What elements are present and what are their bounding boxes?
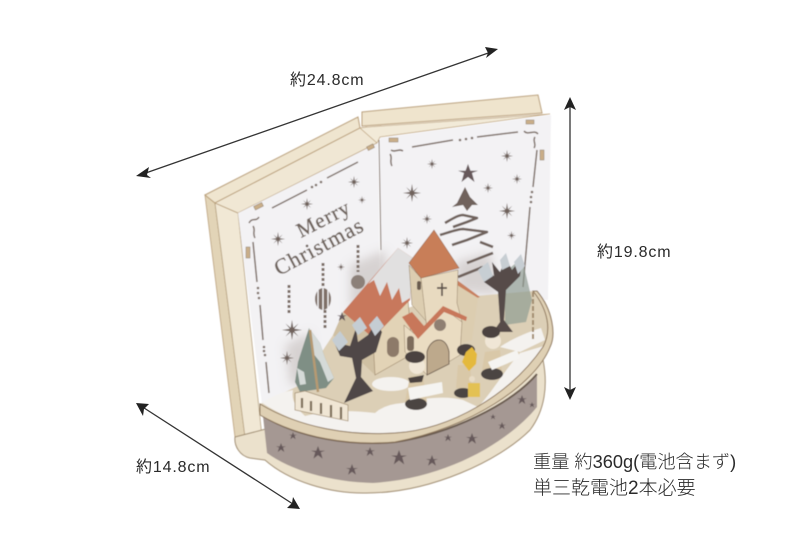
tower cross [437,283,447,296]
dimension arrow: width 24.8cm [136,47,498,178]
rear wood post [532,292,534,339]
side windows [387,337,399,357]
tower [409,265,427,322]
caroler 2 [454,344,480,398]
dimension arrow: height 19.8cm [564,97,576,400]
caroler 3 [481,326,520,380]
caroler 1 [405,351,443,410]
page fold [379,140,381,250]
dimension arrow: depth 14.8cm [136,403,300,509]
picket fence [295,391,348,421]
christmas tree cut-out [440,164,493,277]
page cut-out border lines [249,131,538,393]
side roof right [457,280,480,305]
book cover [205,95,550,437]
right tree behind church [478,253,532,332]
church [333,230,480,375]
label: height: 約19.8cm [597,243,671,261]
left gable shadow wall [333,312,375,375]
drum foot [235,360,545,493]
spec text: 重量 約360g(電池含まず) [533,452,736,472]
lamp tree left [332,316,384,403]
soft shadows on pages [285,250,498,385]
back snow patch [372,377,410,391]
spec text: 単三乾電池2本必要 [533,477,696,499]
rose window [434,319,446,331]
roof snow [368,248,413,303]
product: wooden book diorama [205,95,553,493]
spec text [533,452,736,499]
merry christmas text: Merry [292,195,354,242]
label: width: 約24.8cm [290,71,364,89]
ornament cut-outs [289,245,365,330]
tower roof [409,230,459,278]
star cut-outs [271,150,522,365]
evergreen tree [295,328,334,392]
front snow [262,346,544,434]
right page [380,115,551,300]
wood rim [260,291,553,443]
floor [260,291,548,434]
drum band with stars [263,374,537,483]
door [427,340,449,375]
front gable wall [404,308,462,375]
merry christmas text: Christmas [270,212,368,280]
front gable roof [402,306,467,339]
label: depth: 約14.8cm [136,458,210,476]
nave roof [343,248,413,338]
cut-out dots and slots [257,137,533,356]
nave wall [373,300,412,375]
left page [238,143,380,404]
